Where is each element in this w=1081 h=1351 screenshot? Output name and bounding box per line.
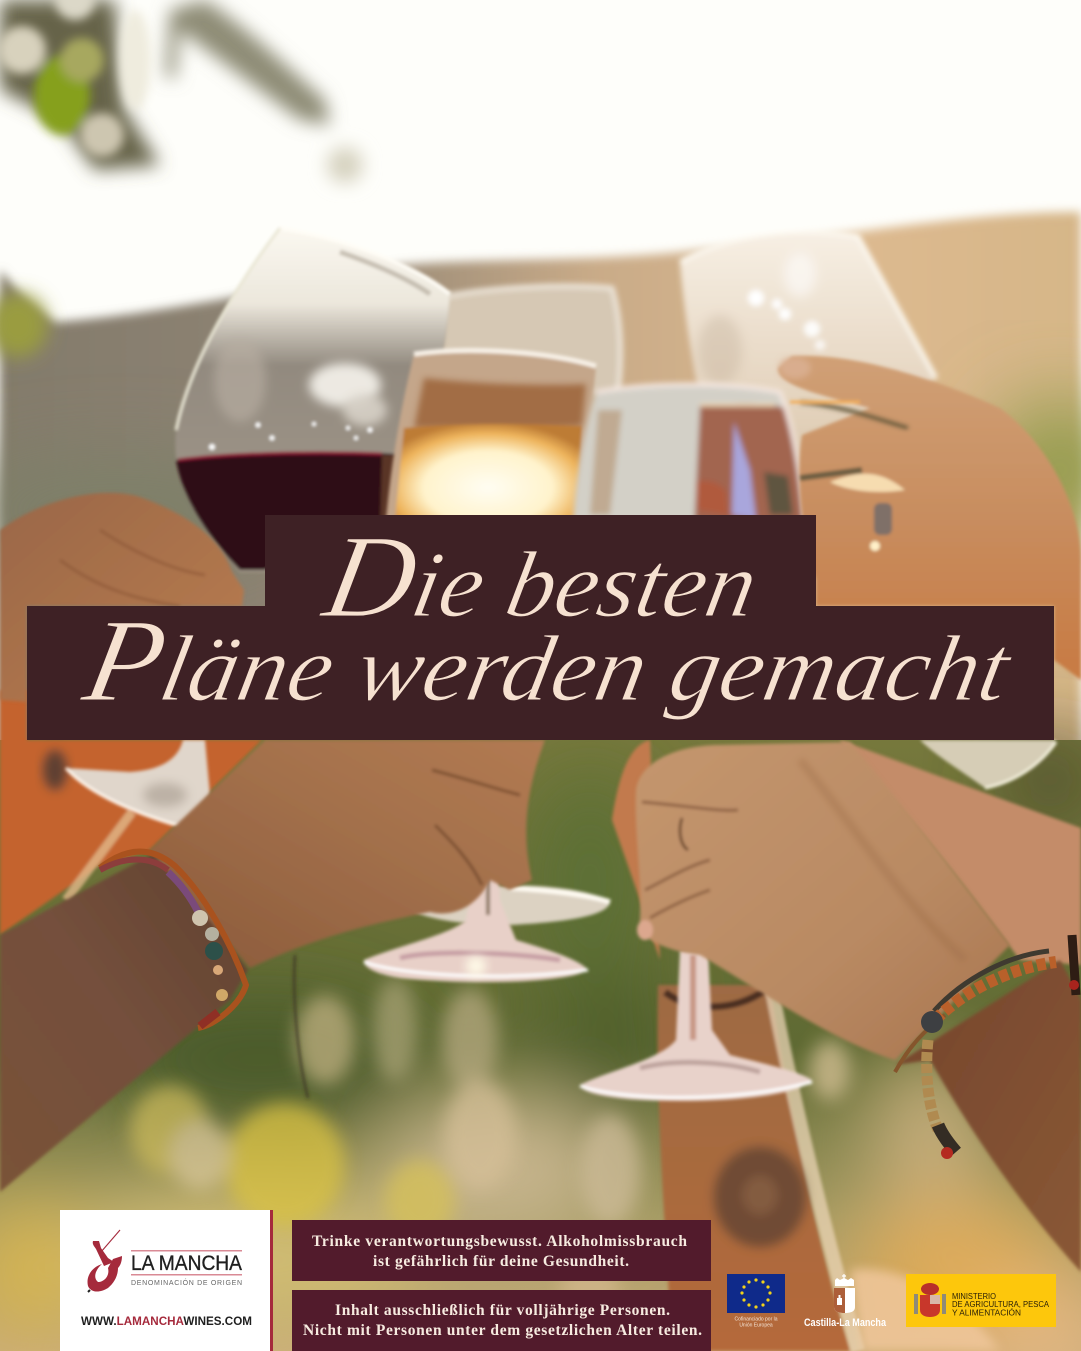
glass foot: left [66, 740, 210, 828]
EU logo [727, 1274, 785, 1328]
logo rule top [131, 1250, 242, 1252]
foliage dark mass [0, 0, 160, 170]
logo subtitle: DENOMINACIÓN DE ORIGEN [131, 1278, 242, 1287]
top left fist [0, 493, 244, 702]
glass: rosé [572, 384, 806, 530]
left forearm and hand [0, 740, 545, 1192]
bracelet: left wrist [100, 852, 246, 1028]
EU logo: Unión Europea [739, 1322, 773, 1328]
logo panel: La Mancha [60, 1210, 273, 1351]
title line 2: Pläne werden gemacht [74, 595, 1025, 726]
wordmark: LA MANCHA [131, 1252, 242, 1275]
Castilla-La Mancha logo [804, 1274, 887, 1329]
wine glasses raised in a toast [66, 228, 1056, 925]
top right hand [778, 356, 1081, 680]
notice: responsible drinking [292, 1220, 711, 1281]
notice: adults only [292, 1290, 711, 1351]
title banner [27, 511, 1054, 740]
notice: responsible drinking: ist gefährlich für deine Gesundheit. [373, 1253, 629, 1270]
icon: coat of arms [914, 1283, 946, 1317]
banner plate [27, 515, 1054, 740]
website: WWW.LAMANCHAWINES.COM [81, 1316, 252, 1328]
title line 1: Die besten [313, 511, 770, 642]
logo rule bottom [131, 1274, 242, 1276]
right stem and base glass [580, 950, 812, 1101]
notice: adults only: Nicht mit Personen unter dem gesetzlichen Alter teilen. [303, 1322, 702, 1339]
Spanish ministry logo: Y ALIMENTACIÓN [952, 1308, 1021, 1318]
glass: white wine [385, 350, 596, 530]
notice: responsible drinking: Trinke verantwortungsbewusst. Alkoholmissbrauch [312, 1233, 687, 1250]
glass: right tilted [680, 232, 936, 470]
right forearm and hand [636, 742, 1081, 1272]
Spanish ministry logo: MINISTERIO [952, 1292, 996, 1301]
glass: red wine [175, 228, 450, 572]
bracelet: right wrist [895, 935, 1079, 1159]
glass foot: rear [406, 886, 610, 925]
left stem and base glass [364, 830, 588, 982]
EU logo: Cofinanciado por la [734, 1316, 778, 1322]
Spanish ministry logo [906, 1274, 1056, 1327]
back arms [0, 690, 1081, 1351]
Spanish ministry logo: DE AGRICULTURA, PESCA [952, 1300, 1050, 1309]
glass foot: right [920, 740, 1056, 788]
Castilla-La Mancha logo: Castilla-La Mancha [804, 1317, 887, 1329]
glass: rear centre [438, 285, 620, 395]
notice: adults only: Inhalt ausschließlich für volljährige Personen. [335, 1302, 670, 1319]
icon: knight on horseback [88, 1230, 122, 1292]
